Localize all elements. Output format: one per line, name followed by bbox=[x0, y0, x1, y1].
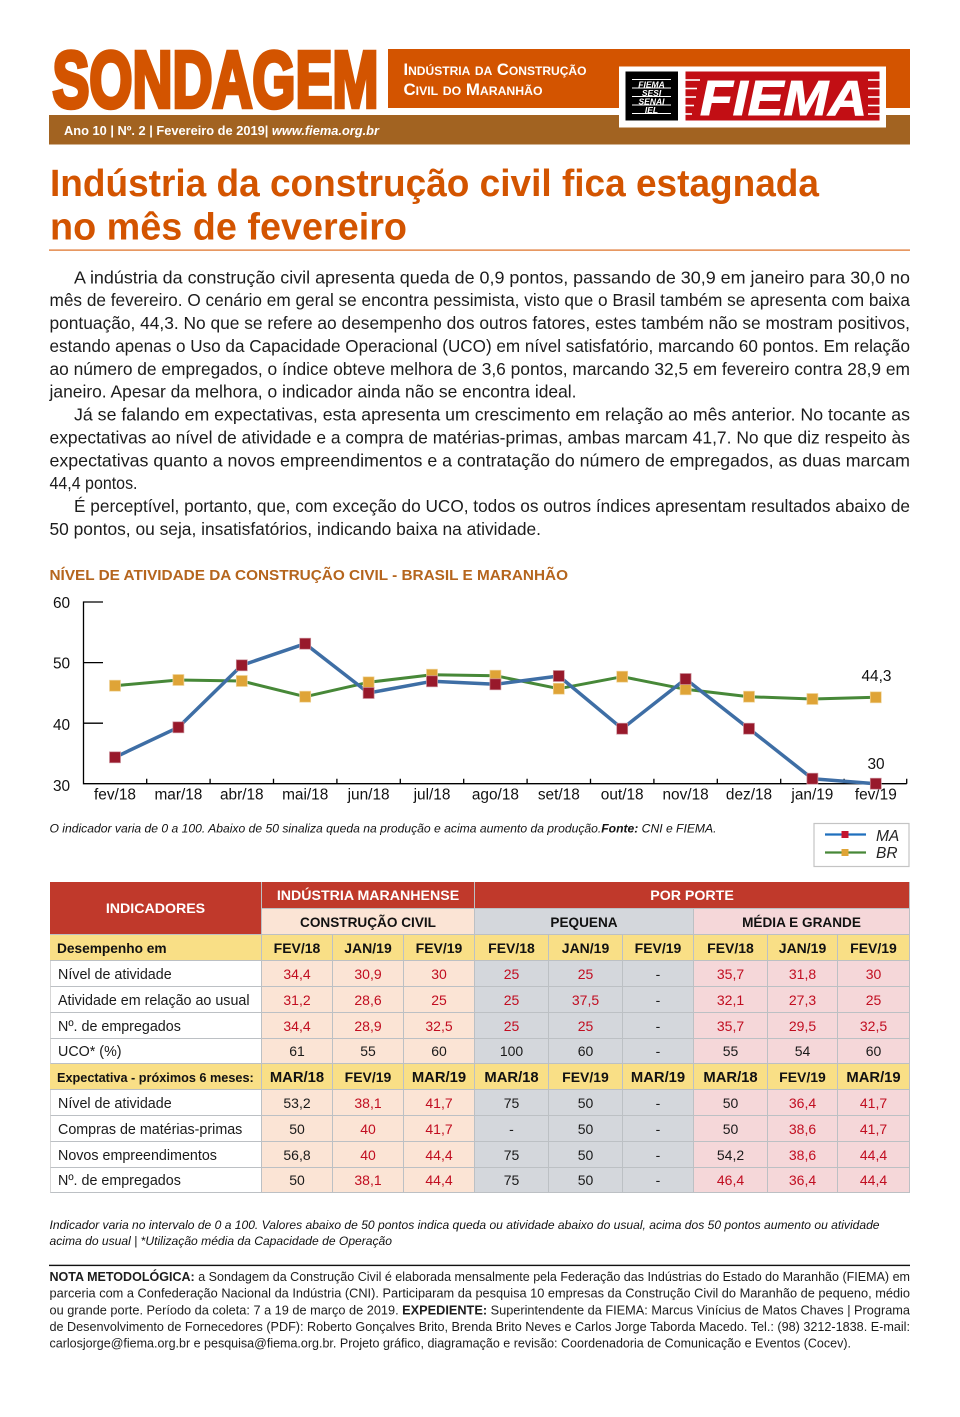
end value labels: 44,3 bbox=[862, 668, 891, 685]
logo: FIEMA: FIEMA bbox=[638, 80, 665, 90]
indicators table: 30,9 bbox=[354, 966, 382, 982]
wordmark: SONDAGEM: SONDAGEM bbox=[52, 35, 378, 124]
indicators table: Nível de atividade bbox=[58, 966, 172, 982]
indicators table: 75 bbox=[504, 1146, 519, 1162]
y axis labels: 50 bbox=[53, 656, 70, 672]
body text: janeiro. Apesar da melhora, o indicador ainda não se encontra ideal. bbox=[48, 382, 576, 402]
indicators table: 44,4 bbox=[425, 1172, 453, 1188]
methodological note: parceria com a Confederação Nacional da Indústria (CNI). Participaram da pesquisa 10 empresas da Construção Civil do Maranhão de pequeno, médio bbox=[50, 1286, 910, 1300]
chart axes bbox=[84, 602, 907, 784]
markers: BR bbox=[110, 669, 881, 704]
indicators table: 34,4 bbox=[283, 1018, 311, 1034]
chart note: O indicador varia de 0 a 100. Abaixo de 50 sinaliza queda na produção e acima aumento da produção.Fonte: CNI e FIEMA. bbox=[50, 822, 716, 836]
indicators table: 31,8 bbox=[789, 966, 816, 982]
body text: pontuação, 44,3. No que se refere ao desempenho dos outros fatores, estes também não se mostram positivos, bbox=[50, 313, 910, 333]
indicators table: 25 bbox=[504, 966, 519, 982]
indicators table: Expectativa - próximos 6 meses: bbox=[57, 1070, 254, 1084]
indicators table: 50 bbox=[578, 1172, 593, 1188]
indicators table: FEV/18 bbox=[274, 940, 320, 956]
indicators table: 38,1 bbox=[354, 1172, 382, 1188]
indicators table: FEV/18 bbox=[488, 940, 535, 956]
indicators table: 30 bbox=[866, 966, 881, 982]
indicators table: 55 bbox=[723, 1043, 738, 1059]
methodological note: de Desenvolvimento de Fornecedores (PDF): Roberto Gonçalves Brito, Brenda Brito Neves e Carlos Jorge Taborda Macedo. Tel.: (98) 3212-1838. E-mail: bbox=[50, 1320, 910, 1334]
methodological note: NOTA METODOLÓGICA: a Sondagem da Construção Civil é elaborada mensalmente pela Federação das Indústrias do Estado do Maranhão (FIEMA) em bbox=[50, 1269, 910, 1284]
indicators table: - bbox=[656, 1094, 660, 1110]
body text: 50 pontos, ou seja, insatisfatórios, indicando baixa na atividade. bbox=[50, 519, 541, 539]
indicators table: Novos empreendimentos bbox=[58, 1148, 217, 1164]
indicators table: - bbox=[656, 966, 660, 982]
indicators table: 50 bbox=[578, 1120, 593, 1136]
indicators table: 38,6 bbox=[789, 1120, 816, 1136]
table footnote bbox=[50, 1218, 880, 1248]
indicators table: - bbox=[509, 1120, 514, 1136]
indicators table: 56,8 bbox=[283, 1146, 311, 1162]
body text bbox=[48, 267, 910, 539]
logo: FIEMA: SESI bbox=[642, 88, 662, 98]
y axis labels bbox=[53, 595, 70, 795]
indicators table: 35,7 bbox=[717, 1018, 744, 1034]
indicators table bbox=[50, 882, 910, 1193]
indicators table: MAR/19 bbox=[846, 1070, 901, 1086]
table footnote: Indicador varia no intervalo de 0 a 100. Valores abaixo de 50 pontos indica queda ou atividade abaixo do usual, acima dos 50 pontos aumento ou atividade bbox=[50, 1218, 880, 1232]
methodological note bbox=[50, 1269, 910, 1350]
indicators table: 36,4 bbox=[789, 1094, 816, 1110]
indicators table: 50 bbox=[578, 1146, 593, 1162]
indicators table: 25 bbox=[578, 966, 593, 982]
indicators table: 44,4 bbox=[860, 1146, 887, 1162]
indicators table: 50 bbox=[578, 1094, 593, 1110]
indicators table: 60 bbox=[578, 1043, 593, 1059]
indicators table: 28,9 bbox=[354, 1018, 382, 1034]
indicators table: MAR/18 bbox=[484, 1070, 539, 1086]
indicators table: FEV/19 bbox=[850, 940, 897, 956]
body text: É perceptível, portanto, que, com exceção do UCO, todos os outros índices apresentam resultados abaixo de bbox=[74, 496, 910, 516]
indicators table: 40 bbox=[360, 1146, 376, 1162]
indicators table: - bbox=[656, 1043, 660, 1059]
indicators table: 35,7 bbox=[717, 966, 744, 982]
indicators table: INDICADORES bbox=[106, 901, 205, 917]
body text: estando apenas o Uso da Capacidade Operacional (UCO) em nível satisfatório, marcando 60 pontos. Em relação bbox=[50, 336, 910, 356]
indicators table: - bbox=[656, 1146, 660, 1162]
indicators table: PEQUENA bbox=[550, 914, 618, 930]
y axis labels: 40 bbox=[53, 717, 70, 734]
indicators table: - bbox=[656, 1120, 660, 1136]
main headline bbox=[50, 163, 820, 248]
issue information: Ano 10 | Nº. 2 | Fevereiro de 2019| www.fiema.org.br bbox=[64, 123, 380, 138]
indicators table: 36,4 bbox=[789, 1172, 816, 1188]
x axis labels: ago/18 bbox=[472, 786, 519, 804]
series line: MA bbox=[115, 644, 876, 784]
indicators table: 50 bbox=[289, 1172, 305, 1188]
indicators table: 50 bbox=[723, 1120, 738, 1136]
main headline: Indústria da construção civil fica estagnada bbox=[50, 163, 820, 205]
indicators table: FEV/19 bbox=[345, 1068, 391, 1084]
indicators table: 100 bbox=[500, 1043, 523, 1059]
x axis labels: jan/19 bbox=[790, 786, 833, 804]
indicators table: 53,2 bbox=[283, 1094, 311, 1110]
indicators table: 34,4 bbox=[283, 966, 311, 982]
indicators table: MAR/19 bbox=[631, 1070, 685, 1086]
indicators table: 50 bbox=[289, 1120, 305, 1136]
header brown issue bar bbox=[49, 115, 910, 144]
end value labels: 30 bbox=[868, 756, 885, 773]
indicators table: 32,1 bbox=[717, 992, 744, 1008]
x axis labels: mai/18 bbox=[282, 786, 328, 804]
indicators table: 38,1 bbox=[354, 1094, 382, 1110]
body text: Já se falando em expectativas, esta apresenta um crescimento em relação ao mês anterior. No tocante as bbox=[74, 404, 910, 424]
methodological note: ou grande porte. Período da coleta: 7 a 19 de março de 2019. EXPEDIENTE: Superintendente da FIEMA: Marcus Vinícius de Matos Chaves | Programa bbox=[50, 1303, 910, 1317]
indicators table: MAR/18 bbox=[703, 1070, 758, 1086]
indicators table: FEV/18 bbox=[707, 940, 754, 956]
indicators table: 41,7 bbox=[425, 1120, 453, 1136]
indicators table: INDÚSTRIA MARANHENSE bbox=[277, 888, 459, 904]
indicators table: MAR/18 bbox=[270, 1070, 324, 1086]
x axis labels: fev/19 bbox=[855, 786, 897, 804]
series line: BR bbox=[115, 675, 876, 699]
indicators table: 38,6 bbox=[789, 1146, 816, 1162]
indicators table: CONSTRUÇÃO CIVIL bbox=[300, 914, 436, 930]
indicators table: Nº. de empregados bbox=[58, 1173, 181, 1189]
indicators table: 25 bbox=[578, 1018, 593, 1034]
indicators table: Nº. de empregados bbox=[58, 1018, 181, 1034]
indicators table: MÉDIA E GRANDE bbox=[742, 914, 861, 930]
indicators table: JAN/19 bbox=[344, 940, 392, 956]
indicators table: 27,3 bbox=[789, 992, 816, 1008]
x axis labels: dez/18 bbox=[726, 786, 772, 804]
indicators table: 41,7 bbox=[425, 1094, 453, 1110]
indicators table: Atividade em relação ao usual bbox=[58, 992, 250, 1008]
line chart bbox=[53, 595, 907, 804]
body text: mês de fevereiro. O cenário em geral se encontra pessimista, visto que o Brasil também se apresenta com baixa bbox=[50, 290, 910, 310]
indicators table: 46,4 bbox=[717, 1172, 744, 1188]
logo: FIEMA bbox=[619, 66, 886, 128]
end value labels bbox=[862, 668, 891, 773]
main headline: no mês de fevereiro bbox=[50, 206, 407, 248]
body text: ao número de empregados, o índice obteve melhora de 3,6 pontos, marcando 32,5 em fevereiro contra 28,9 em bbox=[50, 359, 910, 379]
indicators table: MAR/19 bbox=[412, 1070, 466, 1086]
indicators table: 28,6 bbox=[354, 992, 382, 1008]
indicators table: 60 bbox=[866, 1043, 881, 1059]
indicators table: 29,5 bbox=[789, 1018, 816, 1034]
x axis labels: jun/18 bbox=[347, 786, 390, 804]
indicators table: Desempenho em bbox=[57, 940, 167, 956]
body text: A indústria da construção civil apresenta queda de 0,9 pontos, passando de 30,9 em janeiro para 30,0 no bbox=[74, 267, 910, 287]
chart legend bbox=[814, 824, 909, 866]
indicators table: FEV/19 bbox=[779, 1068, 826, 1084]
x axis labels: fev/18 bbox=[94, 786, 136, 804]
indicators table: UCO* (%) bbox=[58, 1044, 122, 1060]
markers: MA bbox=[110, 638, 881, 789]
indicators table: FEV/19 bbox=[635, 940, 681, 956]
chart heading: NÍVEL DE ATIVIDADE DA CONSTRUÇÃO CIVIL - BRASIL E MARANHÃO bbox=[50, 566, 568, 584]
indicators table: Compras de matérias-primas bbox=[58, 1122, 242, 1138]
x axis labels: set/18 bbox=[538, 786, 580, 804]
indicators table: - bbox=[656, 1018, 660, 1034]
header subtitle: Civil do Maranhão bbox=[404, 81, 542, 99]
indicators table: 25 bbox=[504, 1018, 519, 1034]
indicators table: POR PORTE bbox=[650, 888, 734, 904]
indicators table: 25 bbox=[431, 992, 447, 1008]
indicators table: 75 bbox=[504, 1172, 519, 1188]
x axis labels bbox=[94, 786, 897, 804]
header subtitle: Indústria da Construção bbox=[404, 61, 586, 79]
indicators table: 40 bbox=[360, 1120, 376, 1136]
x axis labels: abr/18 bbox=[220, 786, 264, 804]
chart legend: MA bbox=[876, 828, 899, 845]
indicators table: 25 bbox=[504, 992, 519, 1008]
indicators table: 32,5 bbox=[860, 1018, 887, 1034]
indicators table: 54,2 bbox=[717, 1146, 744, 1162]
indicators table: 44,4 bbox=[425, 1146, 453, 1162]
header banner bbox=[49, 35, 910, 144]
y axis labels: 30 bbox=[53, 778, 70, 795]
logo: FIEMA: FIEMA bbox=[700, 72, 867, 126]
logo: FIEMA: IEL bbox=[645, 105, 658, 115]
indicators table: 32,5 bbox=[425, 1018, 453, 1034]
body text: expectativas quanto a novos empreendimentos e a contratação do número de empregados, as duas marcam bbox=[50, 450, 910, 470]
indicators table: - bbox=[656, 1172, 660, 1188]
header subtitle bbox=[404, 61, 586, 99]
table footnote: acima do usual | *Utilização média da Capacidade de Operação bbox=[50, 1234, 392, 1248]
logo: FIEMA: SENAI bbox=[639, 96, 665, 106]
x axis labels: mar/18 bbox=[154, 786, 202, 804]
indicators table: 50 bbox=[723, 1094, 738, 1110]
indicators table: 37,5 bbox=[572, 992, 599, 1008]
indicators table: Nível de atividade bbox=[58, 1096, 172, 1112]
indicators table: FEV/19 bbox=[416, 940, 462, 956]
indicators table: 61 bbox=[289, 1043, 305, 1059]
indicators table: 44,4 bbox=[860, 1172, 887, 1188]
indicators table: 30 bbox=[431, 966, 447, 982]
indicators table: JAN/19 bbox=[562, 940, 609, 956]
methodological note: carlosjorge@fiema.org.br e pesquisa@fiema.org.br. Projeto gráfico, diagramação e revisão: Coordenadoria de Comunicação e Eventos (Cocev). bbox=[50, 1336, 851, 1350]
indicators table: 54 bbox=[795, 1043, 810, 1059]
indicators table: JAN/19 bbox=[779, 940, 826, 956]
chart legend: BR bbox=[876, 845, 898, 862]
x axis labels: jul/18 bbox=[413, 786, 450, 804]
body text: 44,4 pontos. bbox=[50, 473, 138, 493]
x axis labels: out/18 bbox=[601, 786, 644, 804]
indicators table: 75 bbox=[504, 1094, 519, 1110]
y axis labels: 60 bbox=[53, 595, 70, 612]
x axis labels: nov/18 bbox=[662, 786, 709, 804]
indicators table: 41,7 bbox=[860, 1120, 887, 1136]
indicators table: - bbox=[656, 992, 660, 1008]
indicators table: 41,7 bbox=[860, 1094, 887, 1110]
indicators table: 25 bbox=[866, 992, 881, 1008]
body text: expectativas ao nível de atividade e a compra de matérias-primas, ambas marcam 41,7. No que diz respeito às bbox=[50, 427, 910, 447]
header orange block bbox=[388, 49, 910, 108]
indicators table: 55 bbox=[360, 1043, 376, 1059]
indicators table: 60 bbox=[431, 1043, 447, 1059]
indicators table: FEV/19 bbox=[562, 1068, 609, 1084]
indicators table: 31,2 bbox=[283, 992, 311, 1008]
